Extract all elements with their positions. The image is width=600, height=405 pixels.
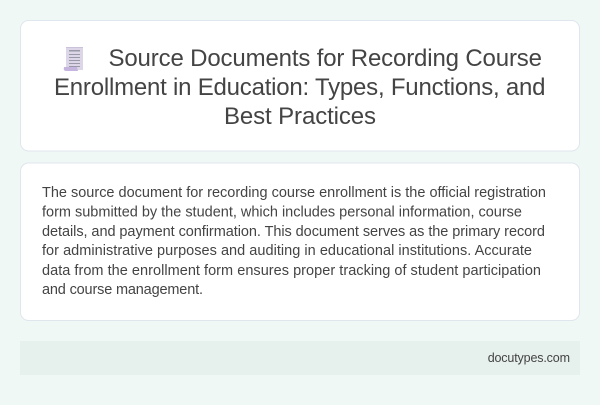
footer text: source: docutypes.com [488,351,570,365]
text block: description: data from the enrollment form ensures proper tracking of student participation [42,263,541,279]
heading: Best Practices [224,103,376,130]
footer bar [20,341,580,375]
panel: description card [20,163,580,320]
heading: Source Documents for Recording Course [108,45,542,72]
heading [54,45,546,130]
text block: description: for administrative purposes and auditing in educational institutions. Accurate [42,243,532,259]
icon: document scroll [64,47,83,71]
panel: title card [20,20,580,151]
text block: description [42,185,546,298]
heading: Enrollment in Education: Types, Functions, and [54,74,546,101]
text block: description: The source document for recording course enrollment is the official registration [42,185,546,201]
text block: description: form submitted by the student, which includes personal information, course [42,204,522,220]
text block: description: and course management. [42,282,203,298]
text block: description: details, and payment confirmation. This document serves as the primary record [42,224,545,240]
